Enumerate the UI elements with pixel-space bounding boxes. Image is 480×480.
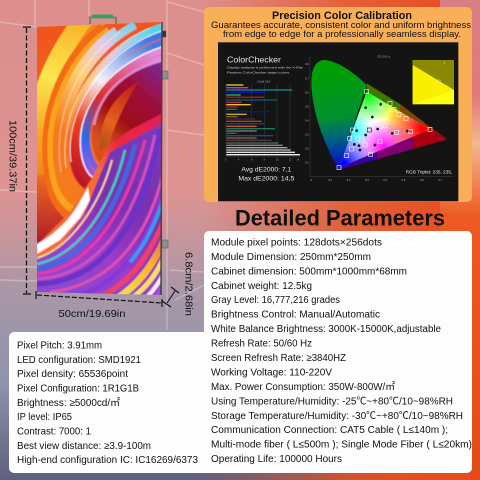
spec list: pixel parameters: Pixel Pitch: 3.91mm (17, 340, 102, 352)
cabinet screen artwork (37, 22, 162, 295)
bar chart: delta E: 0 (225, 160, 227, 162)
panel heading: Precision Color Calibration (272, 10, 412, 22)
CIE chromaticity diagram: 0.5 (305, 104, 309, 108)
bar chart: delta E: 6 (251, 160, 253, 162)
CIE chromaticity diagram: RGB Triplet: 235, 235, (406, 169, 452, 174)
bar chart: delta E: 4 (238, 160, 240, 162)
cabinet right edge (161, 22, 162, 295)
icon: top carry handle (90, 14, 116, 24)
spec list: cabinet parameters: Max. Power Consumption: 350W-800W/㎡ (211, 381, 395, 393)
spec list: cabinet parameters: Module pixel points: 128dots×256dots (211, 238, 382, 248)
gamut outer wedges (339, 83, 447, 170)
average and max delta E readout: Max dE2000: 14,5 (238, 177, 295, 183)
spec list: pixel parameters (17, 340, 198, 466)
white panel background (9, 231, 472, 473)
CIE chromaticity diagram: 0.1 (305, 160, 309, 164)
spec list: cabinet parameters: Refresh Rate: 50/60 Hz (211, 338, 312, 350)
panel description: from edge to edge for a professionally seamless display. (223, 28, 461, 39)
spec list: pixel parameters: Contrast: 7000: 1 (17, 426, 91, 438)
spec list: cabinet parameters: Screen Refresh Rate: ≥3840HZ (211, 353, 346, 364)
CIE chromaticity diagram: 0.6 (420, 178, 424, 182)
spec list: cabinet parameters: Multi-mode fiber ( L≤500m ); Single Mode Fiber ( L≤20km) (211, 440, 472, 451)
spec list: pixel parameters: Pixel density: 65536point (17, 369, 128, 380)
CIE chromaticity diagram: 0.2 (347, 178, 351, 182)
spec list: cabinet parameters (211, 238, 472, 465)
spec list: cabinet parameters: Module Dimension: 250mm*250mm (211, 252, 371, 263)
spec list: pixel parameters: Brightness: ≥5000cd/㎡ (17, 397, 120, 409)
dimension: depth 6.8cm (162, 252, 194, 316)
CIE chromaticity diagram: 0.3 (305, 132, 309, 136)
icon: side latches (162, 31, 168, 248)
spec list: cabinet parameters: Cabinet dimension: 500mm*1000mm*68mm (211, 266, 407, 277)
dimension: width 50cm (36, 291, 162, 320)
CIE chromaticity diagram (305, 56, 454, 182)
panel description: Guarantees accurate, consistent color and uniform brightness (211, 19, 471, 30)
average and max delta E readout: Avg dE2000: 7,1 (241, 167, 292, 173)
LED cabinet product (30, 14, 170, 300)
inset zoomed gamut (413, 60, 454, 104)
CIE chromaticity diagram: 0 (310, 178, 312, 182)
CIE chromaticity diagram: 0.6 (305, 90, 309, 94)
report title: DeltaE 2000 (257, 81, 271, 84)
spec list: pixel parameters: LED configuration: SMD1921 (17, 355, 141, 366)
CIE chromaticity diagram: 0.7 (438, 178, 443, 182)
bar chart: delta E: 12 (289, 160, 292, 162)
CIE chromaticity diagram: 0.2 (305, 146, 309, 150)
measured colour markers (337, 90, 432, 170)
spec list: cabinet parameters: Cabinet weight: 12.5kg (211, 281, 312, 292)
dimension: depth 6.8cm: 6.8cm/2.68in (182, 252, 194, 316)
CIE chromaticity diagram: 0.5 (402, 178, 406, 182)
bar chart: delta E: 10 (276, 160, 279, 162)
bar chart: delta E: 8 (264, 160, 266, 162)
dimension: height 100cm (6, 27, 31, 294)
spec list: pixel parameters: High-end configuration IC: IC16269/6373 (17, 455, 198, 466)
CIE chromaticity diagram: 0.4 (383, 178, 388, 182)
dimension: height 100cm: 100cm/39.37in (6, 120, 18, 192)
spec list: pixel parameters: Pixel Configuration: 1R1G1B (17, 384, 139, 394)
panel: precision color calibration (204, 7, 472, 202)
report title (227, 54, 304, 84)
spec list: cabinet parameters: White Balance Brightness: 3000K-15000K,adjustable (211, 324, 441, 335)
CIE chromaticity diagram: 0.3 (365, 178, 369, 182)
panel description (211, 19, 471, 39)
spec list: cabinet parameters: Storage Temperature/Humidity: -30℃~+80℃/10~98%RH (211, 411, 463, 422)
CIE chromaticity diagram: 0.1 (328, 178, 333, 182)
bar chart: delta E (225, 84, 300, 162)
dimension: width 50cm: 50cm/19.69in (58, 308, 126, 320)
panel background (204, 7, 472, 202)
CIE chromaticity diagram: 0.8 (305, 62, 309, 66)
report title: Pantone ColorChecker target colors. (227, 71, 291, 75)
calibration report screenshot (218, 42, 458, 201)
panel: specification tables (9, 231, 472, 473)
CIE chromaticity diagram: 0.7 (305, 76, 309, 80)
spec list: cabinet parameters: Brightness Control: Manual/Automatic (211, 310, 380, 321)
spec list: pixel parameters: IP level: IP65 (17, 412, 72, 423)
bar chart: delta E: 14 (297, 160, 300, 162)
main heading: Detailed Parameters (235, 206, 445, 230)
spec list: cabinet parameters: Working Voltage: 110-220V (211, 368, 332, 378)
average and max delta E readout (238, 167, 295, 183)
CIE chromaticity diagram: CIE 1931 xy (377, 56, 391, 58)
spec list: cabinet parameters: Using Temperature/Humidity: -25℃~+80℃/10~98%RH (211, 396, 453, 408)
spec list: cabinet parameters: Operating Life: 100000 Hours (211, 454, 342, 465)
spec list: cabinet parameters: Gray Level: 16,777,216 grades (211, 295, 340, 306)
report title: Display analysis is performed with the X-Rite (227, 65, 304, 69)
report title: ColorChecker (227, 54, 281, 64)
CIE chromaticity diagram: 0.4 (305, 118, 309, 122)
spec list: pixel parameters: Best view distance: ≥3.9-100m (17, 441, 151, 452)
spec list: cabinet parameters: Communication Connection: CAT5 Cable ( L≤140m ); (211, 425, 448, 436)
